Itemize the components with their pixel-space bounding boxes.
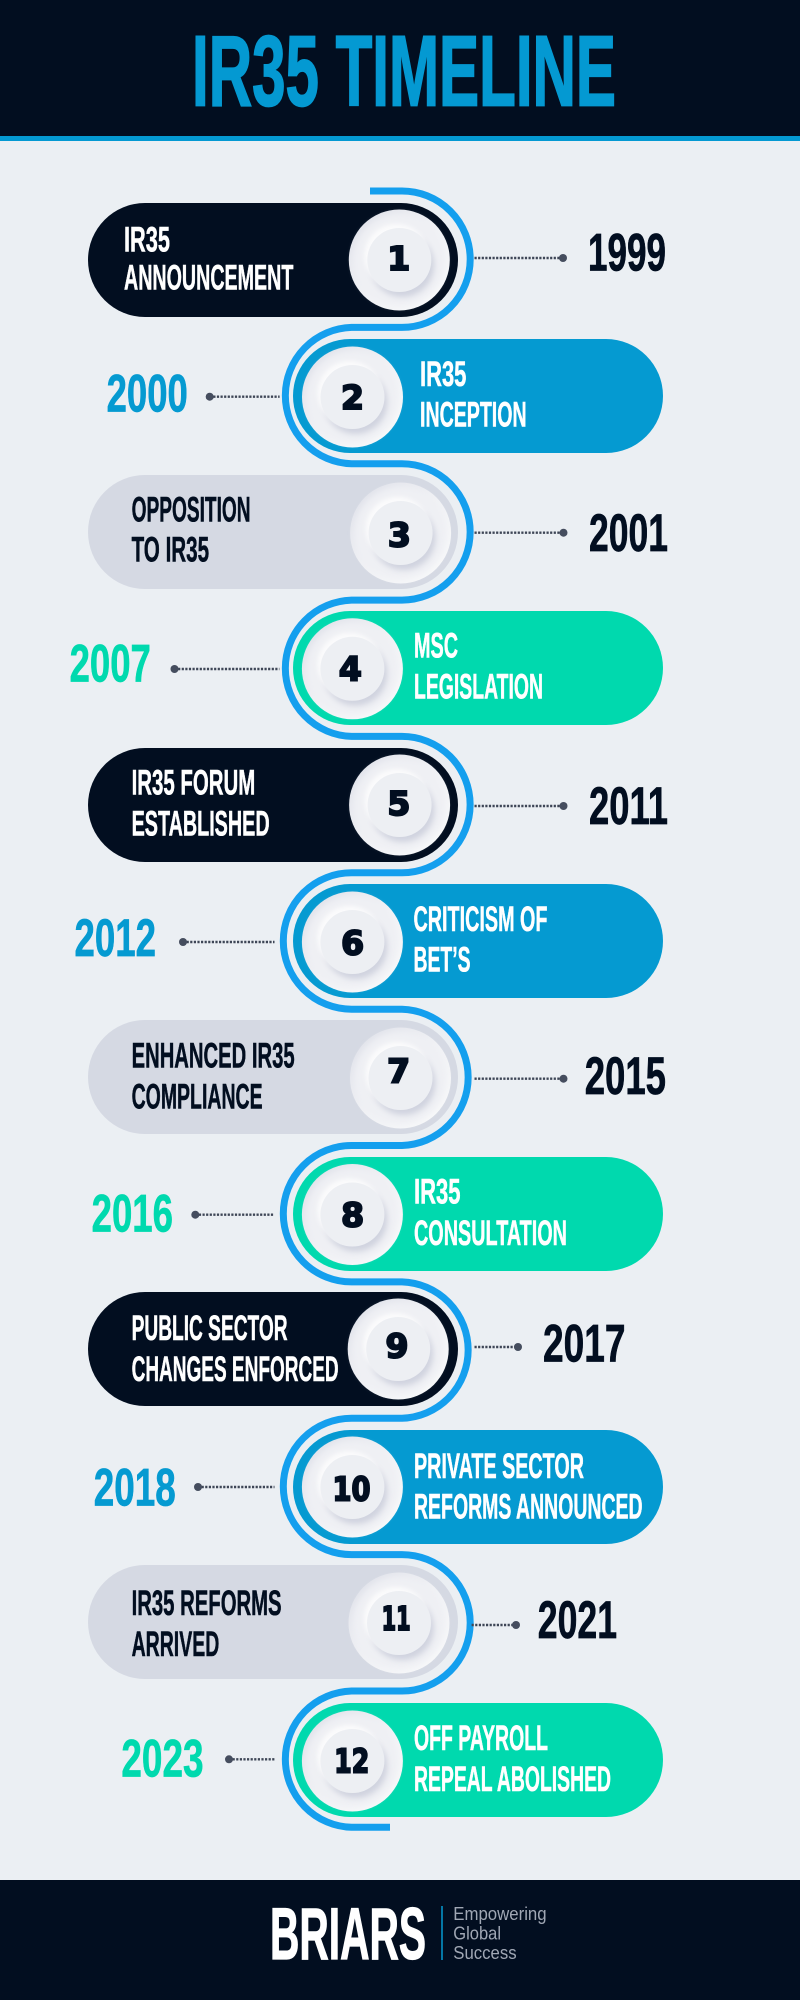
event 9: 2017	[132, 1298, 626, 1400]
label: IR35	[420, 355, 466, 394]
number disc: 11	[382, 1599, 411, 1638]
label: IR35 REFORMS	[132, 1584, 282, 1623]
pill 4 green	[293, 611, 663, 725]
label: OFF PAYROLL	[414, 1719, 548, 1758]
logo divider	[441, 1906, 443, 1960]
label	[414, 627, 543, 707]
leader	[474, 529, 568, 537]
header band	[0, 0, 800, 141]
year: 2015	[585, 1047, 666, 1106]
leader	[179, 938, 274, 946]
number disc	[348, 1572, 450, 1674]
label	[132, 491, 251, 570]
label: IR35	[124, 221, 170, 260]
event 5: 2011	[132, 754, 668, 856]
tagline	[453, 1904, 547, 1963]
year: 2021	[538, 1591, 617, 1650]
label: PUBLIC SECTOR	[132, 1309, 288, 1348]
number disc	[302, 1710, 403, 1812]
event 6: 2012	[74, 892, 548, 992]
number disc	[348, 1298, 449, 1400]
number disc: 10	[332, 1470, 370, 1509]
leader	[472, 1621, 520, 1629]
leader	[191, 1211, 274, 1219]
label: CONSULTATION	[414, 1214, 567, 1253]
pills	[88, 203, 663, 1817]
label: INCEPTION	[420, 396, 527, 435]
label: IR35 FORUM	[132, 764, 255, 803]
label	[414, 1173, 567, 1253]
label	[132, 764, 270, 844]
number disc: 4	[339, 650, 362, 689]
label: BET’S	[414, 941, 470, 980]
year: 2012	[74, 909, 156, 968]
number disc	[302, 618, 403, 719]
event 1: 1999	[124, 210, 666, 310]
pill 11 grey	[88, 1565, 458, 1679]
year: 2000	[107, 365, 188, 424]
number disc: 2	[341, 378, 364, 417]
year: 2018	[94, 1459, 176, 1518]
label	[414, 1719, 611, 1799]
number disc	[302, 346, 403, 448]
year: 2023	[121, 1730, 204, 1789]
pill 12 green	[293, 1703, 663, 1817]
label	[124, 221, 293, 297]
label: ANNOUNCEMENT	[124, 258, 293, 297]
leader	[474, 1343, 522, 1351]
label: IR35	[414, 1173, 460, 1212]
tagline: Success	[453, 1943, 517, 1963]
tagline: Empowering	[453, 1904, 547, 1924]
label: CRITICISM OF	[414, 900, 548, 939]
number disc: 5	[387, 784, 410, 823]
event 2: 2000	[107, 346, 527, 448]
label: PRIVATE SECTOR	[414, 1447, 584, 1486]
label: CHANGES ENFORCED	[132, 1350, 339, 1389]
tagline: Global	[453, 1923, 501, 1943]
label: MSC	[414, 627, 458, 666]
pill 1 dark	[88, 203, 458, 317]
label	[132, 1309, 339, 1389]
year: 1999	[588, 224, 666, 283]
label: TO IR35	[132, 531, 209, 570]
leader	[474, 254, 567, 262]
number disc	[349, 210, 450, 310]
pill 8 green	[293, 1157, 663, 1271]
number disc	[302, 892, 403, 992]
leader	[474, 1075, 568, 1083]
year: 2011	[589, 777, 668, 836]
leader	[225, 1755, 276, 1763]
label: OPPOSITION	[132, 491, 251, 530]
pill 6 blue	[293, 884, 663, 998]
pill 5 dark	[88, 748, 458, 862]
event 3: 2001	[132, 482, 668, 584]
serpentine timeline line	[283, 191, 470, 1827]
number disc	[350, 482, 451, 584]
number disc: 12	[334, 1741, 369, 1780]
label: LEGISLATION	[414, 668, 543, 707]
label	[132, 1037, 295, 1117]
number disc: 6	[341, 924, 364, 963]
footer band	[0, 1880, 800, 2000]
label	[420, 355, 527, 435]
label: ESTABLISHED	[132, 805, 270, 844]
label: COMPLIANCE	[132, 1078, 263, 1117]
year: 2017	[543, 1314, 626, 1373]
number disc	[349, 754, 450, 856]
event 10: 2018	[94, 1436, 643, 1538]
pill 2 blue	[293, 339, 663, 453]
pill 10 blue	[293, 1430, 663, 1544]
number disc	[302, 1164, 403, 1265]
label: ENHANCED IR35	[132, 1037, 295, 1076]
year: 2016	[92, 1185, 173, 1244]
pill 3 grey	[88, 475, 458, 589]
label	[414, 900, 548, 980]
logo wordmark: BRIARS	[270, 1894, 426, 1975]
number disc: 7	[387, 1051, 410, 1090]
number disc	[350, 1028, 451, 1128]
number disc: 8	[341, 1195, 364, 1234]
event 8: 2016	[92, 1164, 567, 1265]
event 11: 2021	[132, 1572, 617, 1674]
event 7: 2015	[132, 1028, 666, 1128]
number disc	[302, 1436, 403, 1538]
label: ARRIVED	[132, 1625, 219, 1664]
leader	[474, 802, 568, 810]
pill 7 grey	[88, 1020, 458, 1134]
number disc: 1	[387, 239, 410, 278]
year: 2001	[589, 504, 668, 563]
event 12: 2023	[121, 1710, 611, 1812]
leader	[194, 1483, 274, 1491]
number disc: 3	[388, 516, 411, 555]
label	[132, 1584, 282, 1664]
leader	[170, 665, 279, 673]
label	[414, 1447, 643, 1527]
event 4: 2007	[70, 618, 543, 719]
number disc: 9	[386, 1326, 408, 1365]
pill 9 dark	[88, 1292, 458, 1406]
leader	[206, 393, 280, 401]
label: REPEAL ABOLISHED	[414, 1760, 611, 1799]
year: 2007	[70, 635, 151, 694]
